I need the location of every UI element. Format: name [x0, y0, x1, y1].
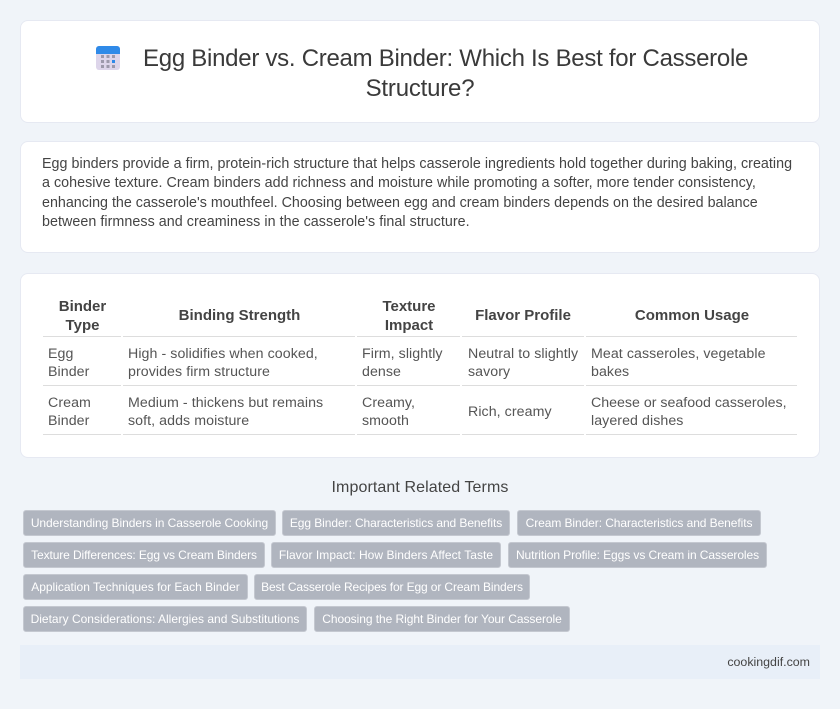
table row: egg binder: Egg [48, 346, 73, 362]
table header: Type [66, 317, 99, 334]
intro paragraph [42, 156, 792, 230]
panel: intro text [20, 141, 820, 253]
tag: Nutrition Profile: Eggs vs Cream in Casseroles [516, 548, 759, 562]
intro paragraph: a cohesive texture. Cream binders add richness and moisture while promoting a softer, more tender consistency, [42, 175, 756, 191]
header panel [20, 20, 820, 123]
table header [59, 298, 749, 334]
table header: Texture [382, 298, 436, 315]
table row: cream binder: smooth [362, 413, 409, 429]
table row: cream binder: Rich, creamy [468, 404, 552, 420]
table row: cream binder: Binder [48, 413, 89, 429]
tag [282, 510, 510, 536]
table row: egg binder: bakes [591, 364, 629, 380]
related terms tags [23, 510, 767, 632]
table row: cream binder: layered dishes [591, 413, 683, 429]
table header: Common Usage [635, 307, 749, 324]
panel: comparison table [20, 273, 820, 458]
table row: cream binder: Medium - thickens but remains [128, 395, 323, 411]
table header: Flavor Profile [475, 307, 571, 324]
table row: egg binder [48, 346, 766, 380]
table header: Binder [59, 298, 106, 315]
tag [23, 574, 248, 600]
table header: Binding Strength [179, 307, 300, 324]
icon: calendar [96, 46, 120, 70]
table row: egg binder: High - solidifies when cooked, [128, 346, 318, 362]
table row: egg binder: Neutral to slightly [468, 346, 578, 362]
tag: Texture Differences: Egg vs Cream Binders [31, 548, 257, 562]
tag [271, 542, 501, 568]
tag: Cream Binder: Characteristics and Benefits [526, 516, 752, 530]
intro paragraph: between firmness and creaminess in the casserole's final structure. [42, 214, 470, 230]
table row: cream binder: Creamy, [362, 395, 415, 411]
table row: egg binder: Meat casseroles, vegetable [591, 346, 766, 362]
title: Egg Binder vs. Cream Binder: Which Is Best for Casserole [143, 45, 748, 72]
table row: egg binder: dense [362, 364, 401, 380]
tag [23, 510, 276, 536]
tag [23, 606, 307, 632]
tag: Egg Binder: Characteristics and Benefits [290, 516, 502, 530]
table row: cream binder [48, 395, 787, 429]
tag: Dietary Considerations: Allergies and Substitutions [31, 612, 299, 626]
footer bar [20, 645, 820, 679]
table row: cream binder: Cream [48, 395, 91, 411]
tag: Choosing the Right Binder for Your Casserole [322, 612, 562, 626]
tag [508, 542, 767, 568]
tag [23, 542, 265, 568]
footer source: cookingdif.com [727, 655, 810, 669]
tag: Application Techniques for Each Binder [31, 580, 240, 594]
tag: Best Casserole Recipes for Egg or Cream Binders [261, 580, 523, 594]
table row: egg binder: Firm, slightly [362, 346, 443, 362]
intro paragraph: Egg binders provide a firm, protein-rich structure that helps casserole ingredients hold together during baking, creating [42, 156, 792, 172]
title [143, 45, 748, 102]
title: Structure? [366, 75, 474, 102]
tag: Flavor Impact: How Binders Affect Taste [279, 548, 493, 562]
tag [254, 574, 530, 600]
heading: related terms: Important Related Terms [332, 479, 508, 496]
table row: egg binder: savory [468, 364, 510, 380]
intro paragraph: enhancing the casserole's mouthfeel. Choosing between egg and cream binders depends on the desired balance [42, 195, 758, 211]
table row: egg binder: Binder [48, 364, 89, 380]
tag [314, 606, 570, 632]
table row: cream binder: soft, adds moisture [128, 413, 249, 429]
tag: Understanding Binders in Casserole Cooking [31, 516, 268, 530]
tag [517, 510, 761, 536]
table row: cream binder: Cheese or seafood casseroles, [591, 395, 787, 411]
table header: Impact [385, 317, 433, 334]
table row: egg binder: provides firm structure [128, 364, 270, 380]
